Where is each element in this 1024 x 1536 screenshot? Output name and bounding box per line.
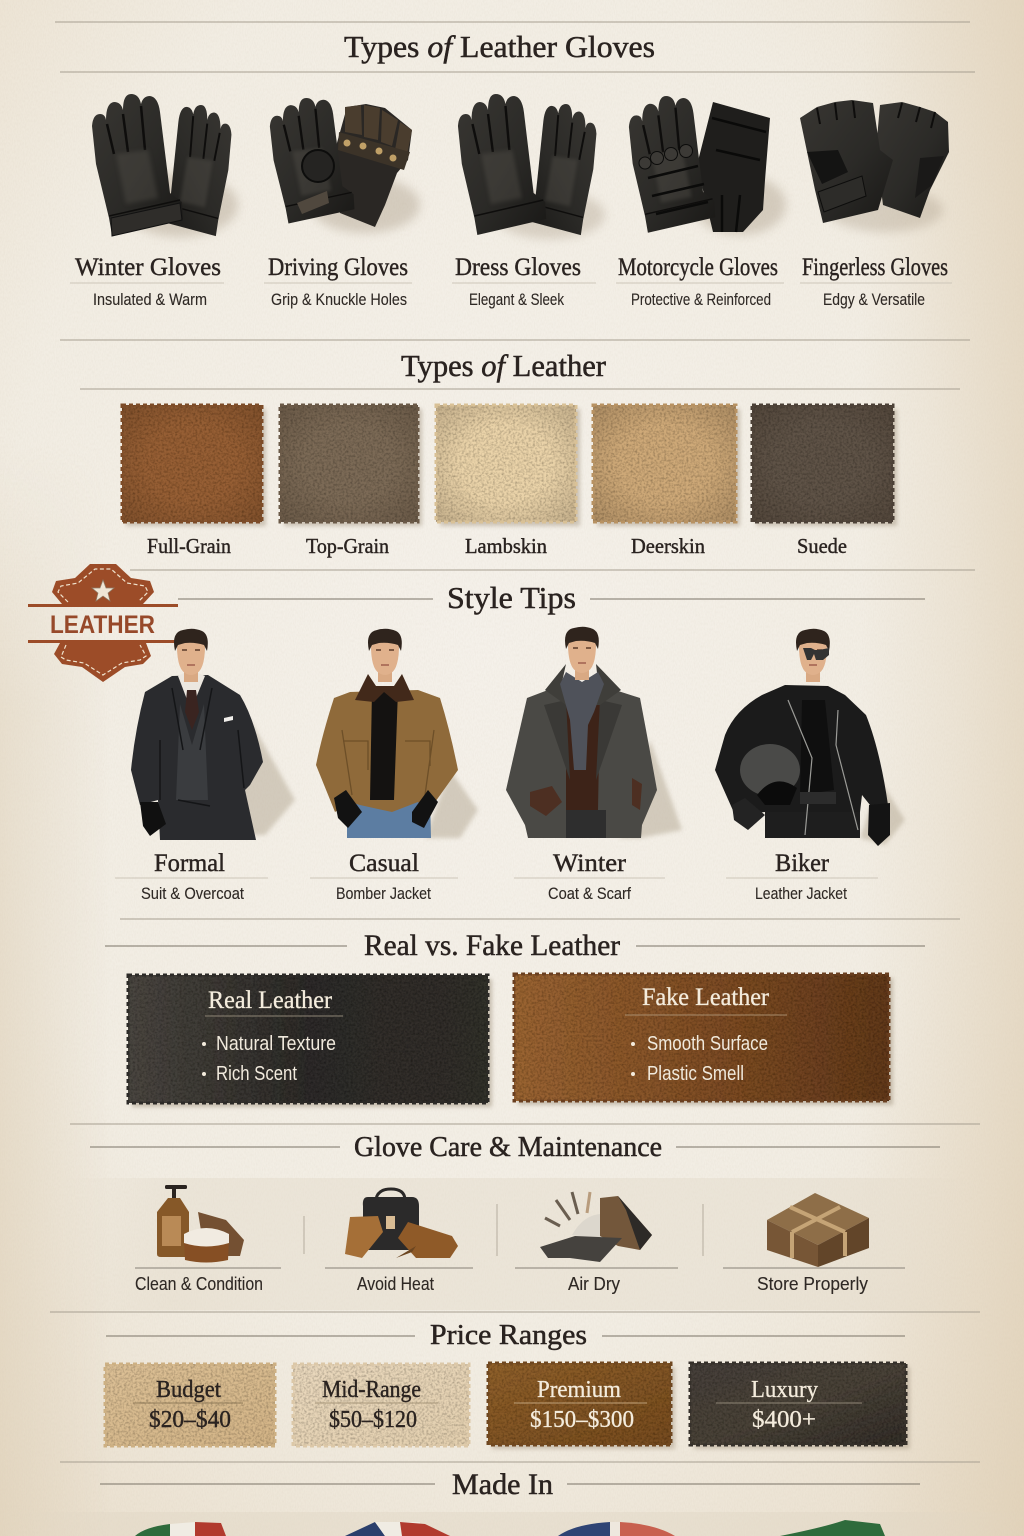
price tag: luxury: $400+ [752,1407,816,1433]
panel: care tips [60,1178,980,1310]
glove: dress [458,94,605,239]
panel: fake leather: Fake Leather [642,984,770,1011]
panel: real leather: Real Leather [208,987,333,1014]
flag: Italy [135,1522,226,1536]
glove labels: Protective & Reinforced [631,290,771,309]
price tag: budget: $20–$40 [149,1407,231,1433]
glove labels: Insulated & Warm [93,290,207,309]
badge: leather: LEATHER [50,611,155,639]
price tag: luxury: Luxury [751,1377,818,1403]
swatch labels: Deerskin [631,534,705,558]
figure: formal [131,629,295,840]
icon: bag and gloves [345,1189,458,1258]
swatch labels [147,534,847,558]
price tag: luxury [690,1363,910,1449]
care labels: Air Dry [568,1274,620,1294]
panel: fake leather: Smooth Surface [647,1033,768,1055]
heading: Types of Leather Gloves: Types of Leather Gloves [344,29,655,64]
swatch: lambskin [436,405,576,522]
swatch labels: Full-Grain [147,534,231,558]
heading: Style Tips: Style Tips [447,580,576,615]
price tag: premium: $150–$300 [530,1407,634,1433]
glove: driving [270,98,420,233]
glove labels: Fingerless Gloves [802,254,948,281]
panel: leather swatches [122,405,897,558]
price tag: mid-range: $50–$120 [329,1407,417,1433]
panel: real leather: Natural Texture [216,1033,336,1055]
panel: price ranges [105,1363,910,1449]
price tag: premium: Premium [537,1377,621,1403]
glove labels [70,254,952,309]
figure labels: Bomber Jacket [336,884,431,903]
figure: biker [715,629,905,846]
icon: storage box [767,1193,869,1267]
figure labels: Biker [775,850,830,877]
figure labels [115,850,878,903]
figure: casual [316,629,478,838]
panel: fake leather: Plastic Smell [647,1063,744,1085]
panel: real leather: Rich Scent [216,1063,297,1085]
glove labels: Driving Gloves [268,254,408,281]
heading: Made In: Made In [452,1468,553,1501]
heading: Types of Leather: Types of Leather [401,348,607,383]
swatch: top-grain [280,405,418,522]
glove labels: Winter Gloves [75,254,221,281]
price tag: budget: Budget [156,1377,221,1403]
swatch labels: Top-Grain [306,534,389,558]
panel: style tips figures [115,627,905,903]
price tag: mid-range [293,1364,469,1446]
swatch: suede [752,405,893,522]
flag: United States [558,1522,675,1536]
panel: real leather [128,975,492,1107]
panel: glove types [70,94,952,309]
glove: motorcycle [629,96,786,235]
heading: Real vs. Fake Leather: Real vs. Fake Leather [364,929,620,962]
care labels: Avoid Heat [357,1274,434,1294]
glove labels: Elegant & Sleek [469,290,564,309]
figure labels: Winter [553,850,627,877]
glove labels: Grip & Knuckle Holes [271,290,407,309]
price tag: premium [488,1363,675,1449]
icon: air dry [540,1192,652,1262]
figure labels: Formal [154,850,225,877]
glove: fingerless [800,100,949,232]
figure labels: Suit & Overcoat [141,884,244,903]
panel: fake leather [514,974,893,1105]
care labels: Clean & Condition [135,1274,263,1294]
glove labels: Dress Gloves [455,254,581,281]
swatch: deerskin [593,405,736,522]
figure labels: Leather Jacket [755,884,847,903]
figure: winter coat [506,627,682,838]
glove: winter [92,94,238,237]
price tag: mid-range: Mid-Range [322,1377,421,1403]
glove labels: Edgy & Versatile [823,290,925,309]
figure labels: Casual [349,850,419,877]
panel: made in flags [0,1512,1024,1536]
price tag: budget [105,1364,275,1446]
care labels: Store Properly [757,1274,868,1294]
care labels [135,1268,905,1294]
heading: Glove Care & Maintenance: Glove Care & Maintenance [354,1131,662,1163]
flag: green [780,1520,885,1536]
swatch labels: Suede [797,534,847,558]
swatch: full-grain [122,405,262,522]
flag: United Kingdom [345,1522,450,1536]
badge: leather [28,564,178,682]
glove labels: Motorcycle Gloves [618,254,778,281]
heading: Price Ranges: Price Ranges [430,1319,587,1351]
swatch labels: Lambskin [465,534,547,558]
figure labels: Coat & Scarf [548,884,631,903]
icon: bottle and jar [157,1185,244,1262]
